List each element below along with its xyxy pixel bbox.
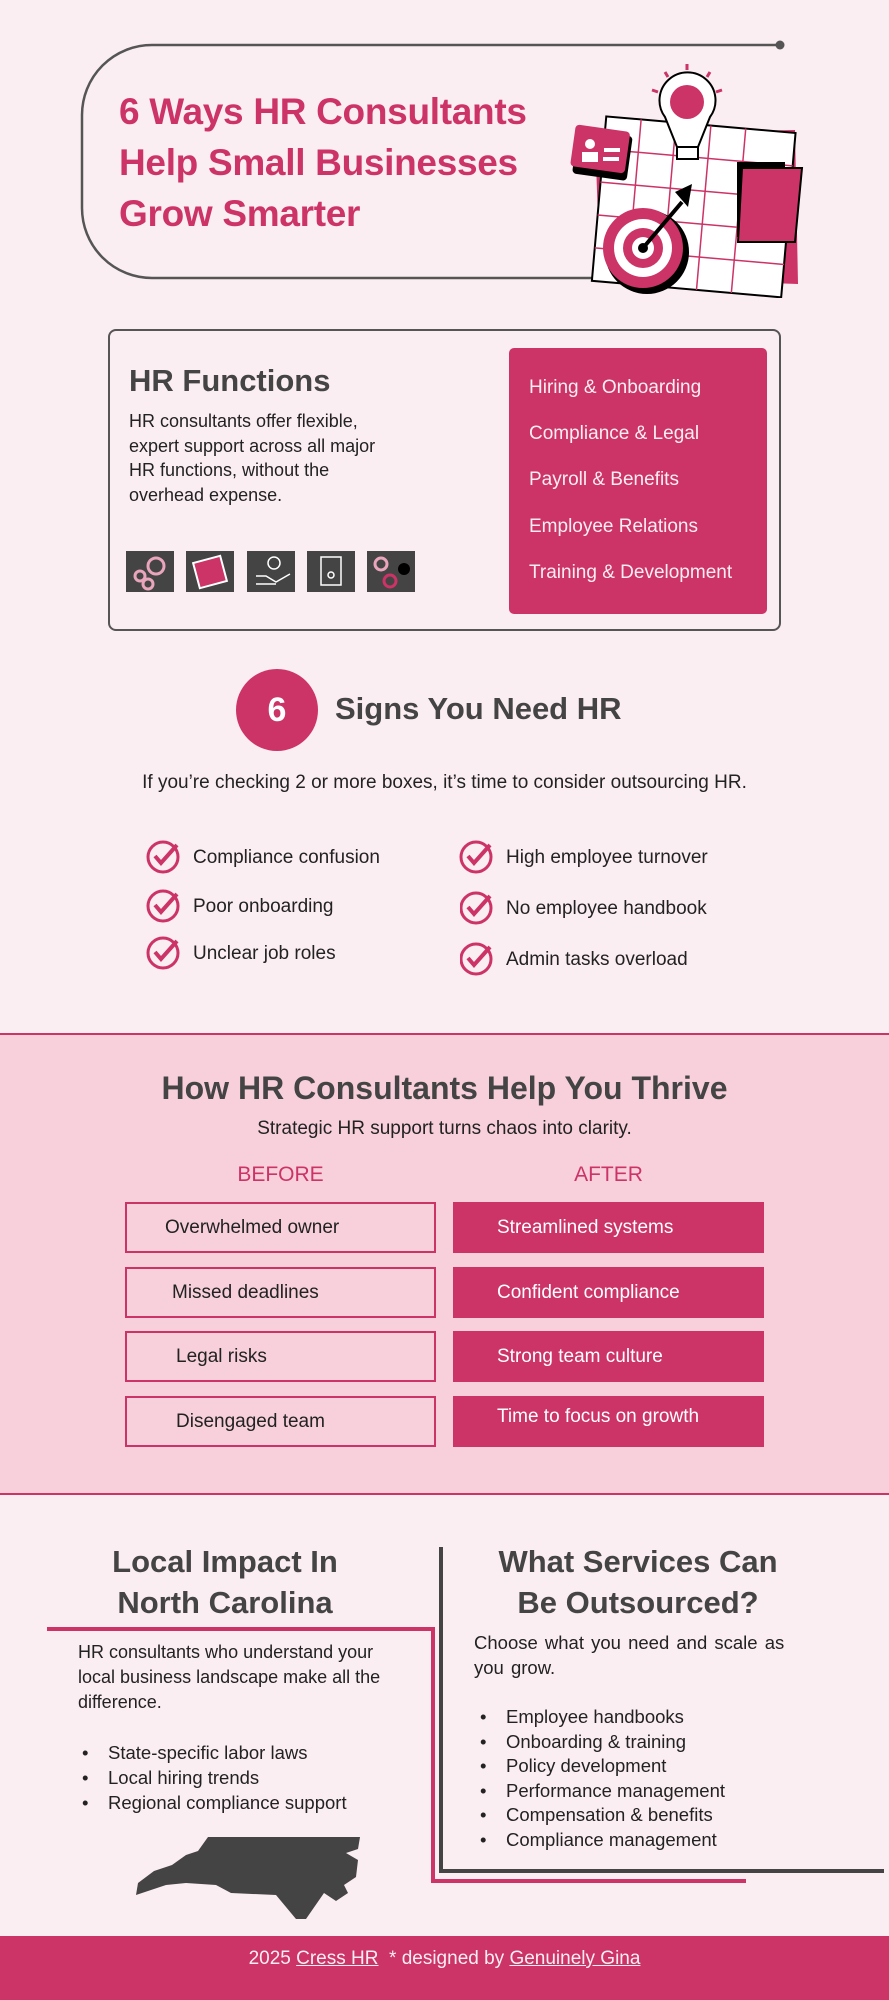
title: Help Small Businesses	[119, 142, 518, 183]
checklist: High employee turnover	[506, 847, 708, 868]
id card	[572, 129, 633, 181]
footer	[0, 1936, 889, 2000]
list: services	[480, 1706, 725, 1850]
panel: before/after: Legal risks	[176, 1346, 267, 1366]
target	[605, 210, 689, 294]
heading: services: What Services Can	[498, 1544, 778, 1579]
frame lines bottom	[47, 1547, 884, 1883]
text: description: HR consultants offer flexible, expert support across all major HR functions, without the overhead expense.	[129, 411, 375, 504]
list box: functions: Compliance & Legal	[529, 423, 699, 444]
title: 6 Ways HR Consultants	[119, 91, 527, 132]
panel: before/after: Missed deadlines	[172, 1282, 319, 1302]
list: services: Performance management	[506, 1780, 725, 1801]
text: services: Choose what you need and scale as you grow.	[474, 1632, 784, 1678]
panel: before/after: Time to focus on growth	[497, 1406, 699, 1427]
list: local	[82, 1742, 347, 1813]
list: local: Regional compliance support	[108, 1792, 347, 1813]
label: before: BEFORE	[237, 1163, 324, 1186]
title: Grow Smarter	[119, 193, 360, 234]
icon: NC map	[136, 1837, 360, 1919]
heading: 6 signs: 6	[268, 691, 286, 729]
checklist: Unclear job roles	[193, 943, 336, 964]
list: services: Employee handbooks	[506, 1706, 684, 1727]
illustration: planning icons	[570, 64, 804, 298]
subtitle: Strategic HR support turns chaos into clarity.	[257, 1118, 632, 1139]
list box: functions: Hiring & Onboarding	[529, 377, 701, 398]
checklist: Compliance confusion	[193, 847, 380, 868]
list box: functions	[509, 348, 767, 614]
label: after: AFTER	[574, 1163, 643, 1186]
checklist: No employee handbook	[506, 898, 707, 919]
list: services: Policy development	[506, 1755, 666, 1776]
icons row	[126, 551, 415, 592]
heading: services	[498, 1544, 778, 1620]
list: services: Onboarding & training	[506, 1731, 686, 1752]
checklist: Admin tasks overload	[506, 949, 688, 970]
checklist: Poor onboarding	[193, 896, 334, 917]
title	[119, 91, 527, 234]
heading: local impact	[112, 1544, 338, 1620]
list: services: Compliance management	[506, 1829, 717, 1850]
heading: local impact: North Carolina	[117, 1585, 333, 1620]
footer: 2025 Cress HR * designed by Genuinely Gina	[249, 1948, 640, 1969]
list: services: Compensation & benefits	[506, 1804, 713, 1825]
list box: functions: Payroll & Benefits	[529, 469, 679, 490]
panel: before/after: Streamlined systems	[497, 1216, 673, 1238]
panel: before/after	[0, 1033, 889, 1495]
panel: before/after: Disengaged team	[176, 1410, 325, 1432]
checklist	[146, 840, 708, 976]
heading: local impact: Local Impact In	[112, 1544, 338, 1579]
heading: thrive: How HR Consultants Help You Thrive	[162, 1070, 727, 1106]
text: checking boxes: If you’re checking 2 or more boxes, it’s time to consider outsourcing HR.	[142, 772, 747, 793]
header frame	[80, 40, 784, 280]
list box: functions: Training & Development	[529, 562, 732, 583]
heading: 6 signs: Signs You Need HR	[335, 691, 622, 726]
bulb	[660, 72, 716, 147]
text: local: HR consultants who understand your local business landscape make all the difference.	[78, 1642, 380, 1712]
heading: 6 signs	[236, 669, 622, 751]
heading: HR Functions: HR Functions	[129, 363, 330, 398]
heading: services: Be Outsourced?	[517, 1585, 759, 1620]
list: local: State-specific labor laws	[108, 1742, 307, 1763]
folder	[737, 162, 785, 237]
panel: before/after: Strong team culture	[497, 1346, 663, 1366]
panel: HR functions	[108, 329, 781, 631]
list: local: Local hiring trends	[108, 1767, 259, 1788]
list box: functions: Employee Relations	[529, 516, 698, 537]
panel: before/after: Confident compliance	[497, 1282, 680, 1302]
panel: before/after: Overwhelmed owner	[165, 1216, 339, 1238]
